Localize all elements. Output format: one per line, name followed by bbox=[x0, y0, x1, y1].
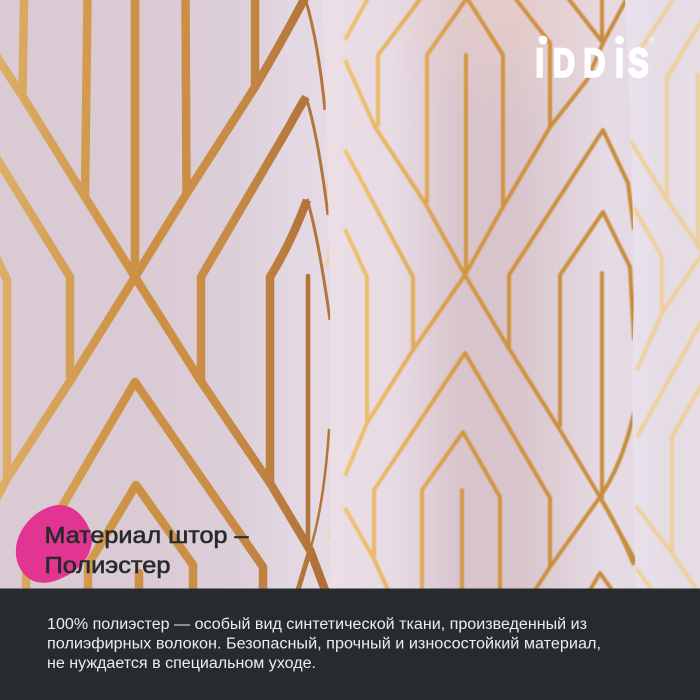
photo: central curtain fold with gold pattern bbox=[320, 0, 640, 590]
photo: left curtain fold with gold pattern bbox=[0, 0, 354, 592]
logo wordmark: IDDIS bbox=[536, 40, 649, 86]
heading: Материал штор – bbox=[44, 522, 249, 548]
photo: far right curtain fold bbox=[620, 0, 700, 590]
heading: Полиэстер bbox=[44, 552, 170, 578]
bottom dark band bbox=[0, 588, 700, 700]
logo: iDDiS bbox=[536, 36, 655, 86]
faint pattern seen through the fold edge bbox=[324, 103, 330, 542]
description text: не нуждается в специальном уходе. bbox=[47, 655, 316, 672]
pink blob behind heading bbox=[16, 505, 92, 583]
registered mark: ® bbox=[649, 36, 655, 44]
description text: 100% полиэстер — особый вид синтетической ткани, произведенный из bbox=[47, 616, 587, 633]
logo dot: second i bbox=[615, 36, 624, 44]
description text: полиэфирных волокон. Безопасный, прочный и износостойкий материал, bbox=[47, 636, 601, 652]
logo dot: first i bbox=[539, 36, 547, 44]
